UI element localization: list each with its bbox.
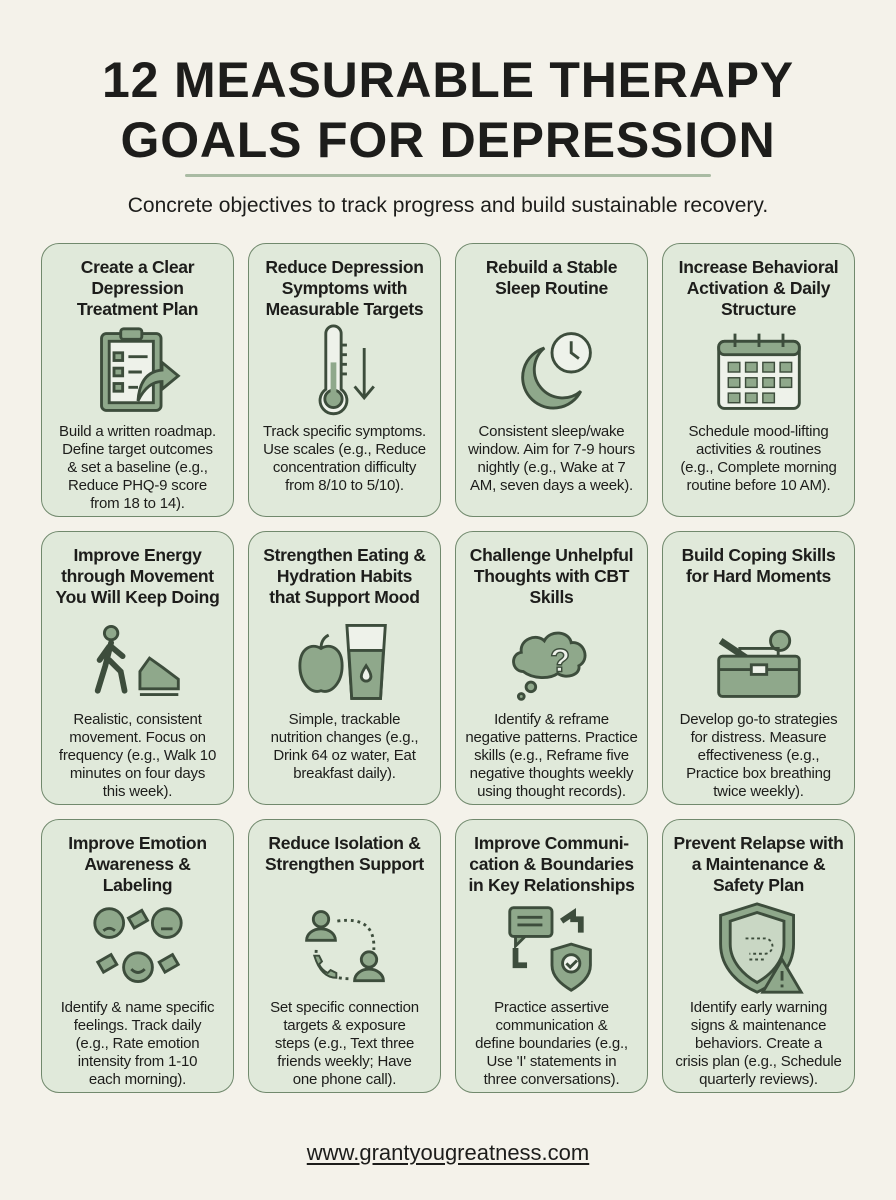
card 8: effectiveness (e.g., [698,747,819,764]
card 6: Hydration Habits [277,566,412,586]
card 2: Use scales (e.g., Reduce [263,441,426,458]
icon: thought cloud: ? [550,642,570,679]
card 4 [662,243,855,517]
card 11: cation & Boundaries [469,854,634,874]
card 4: (e.g., Complete morning [680,459,837,476]
card 9 [41,819,234,1093]
card 11: define boundaries (e.g., [475,1035,628,1052]
card 10: steps (e.g., Text three [275,1035,414,1052]
card 12: quarterly reviews). [699,1071,818,1088]
card 10 [248,819,441,1093]
card 5: movement. Focus on [69,729,206,746]
card 1: Treatment Plan [77,299,198,319]
card 11: Practice assertive [494,999,609,1016]
card 7: Challenge Unhelpful [470,545,633,565]
card 8: for Hard Moments [686,566,831,586]
card 8: for distress. Measure [691,729,826,746]
card 9: each morning). [89,1071,186,1088]
card 7: negative patterns. Practice [465,729,638,746]
card 5: this week). [103,783,172,800]
card 8: Practice box breathing [686,765,831,782]
card 3: AM, seven days a week). [470,477,633,494]
card 3: Rebuild a Stable [486,257,617,277]
card 3: window. Aim for 7-9 hours [468,441,635,458]
card 5 [41,531,234,805]
card 4: Activation & Daily [687,278,830,298]
card 7: negative thoughts weekly [470,765,633,782]
card 8 [662,531,855,805]
card 1: from 18 to 14). [90,495,185,512]
card 10: friends weekly; Have [277,1053,412,1070]
icon: thermometer [318,324,375,416]
card 2: Track specific symptoms. [263,423,426,440]
icon: calendar [717,334,801,410]
card 9: intensity from 1-10 [78,1053,197,1070]
card 5: frequency (e.g., Walk 10 [59,747,216,764]
card 5: through Movement [61,566,214,586]
card 6: that Support Mood [269,587,420,607]
card 5: Realistic, consistent [73,711,202,728]
card 3 [455,243,648,517]
card 7: skills (e.g., Reframe five [474,747,629,764]
card 2: Symptoms with [282,278,407,298]
card 8: twice weekly). [713,783,804,800]
card 10: one phone call). [293,1071,396,1088]
card 1: Define target outcomes [62,441,213,458]
card 12: behaviors. Create a [695,1035,822,1052]
card 2: concentration difficulty [273,459,416,476]
card 1: Build a written roadmap. [59,423,216,440]
card 6 [248,531,441,805]
card 9: feelings. Track daily [74,1017,201,1034]
card 4: Increase Behavioral [679,257,838,277]
card 11: in Key Relationships [468,875,635,895]
card 12: Identify early warning [690,999,827,1016]
card 9: Improve Emotion [68,833,207,853]
icon: walker and shoe [94,625,180,696]
icon: shield with warning [719,902,804,994]
card 12: crisis plan (e.g., Schedule [675,1053,842,1070]
card 6: Simple, trackable [289,711,400,728]
card 3: nightly (e.g., Wake at 7 [477,459,626,476]
card 12: Prevent Relapse with [673,833,844,853]
title [102,52,794,168]
card 4: Schedule mood-lifting [688,423,829,440]
card 12: a Maintenance & [692,854,825,874]
card 4: activities & routines [696,441,821,458]
icon: clipboard [100,327,180,412]
card 12 [662,819,855,1093]
card 2: Measurable Targets [266,299,423,319]
card 4: Structure [721,299,796,319]
title: 12 MEASURABLE THERAPY [102,52,794,108]
card 9: Awareness & [84,854,191,874]
card 1: Create a Clear [81,257,194,277]
card 11: Use 'I' statements in [487,1053,616,1070]
card 5: You Will Keep Doing [56,587,219,607]
card 8: Build Coping Skills [682,545,835,565]
card 10: Set specific connection [270,999,419,1016]
card 7: Thoughts with CBT [474,566,629,586]
card 6: breakfast daily). [293,765,396,782]
card 12: signs & maintenance [691,1017,826,1034]
card 1: Depression [91,278,184,298]
card 11: Improve Communi- [474,833,629,853]
card 5: Improve Energy [73,545,202,565]
card 4: routine before 10 AM). [686,477,831,494]
card 9: (e.g., Rate emotion [76,1035,199,1052]
card 7 [455,531,648,805]
card 1: Reduce PHQ-9 score [68,477,207,494]
card 2: from 8/10 to 5/10). [285,477,404,494]
icon: toolbox [717,630,801,698]
card 6: nutrition changes (e.g., [271,729,418,746]
icon: chat and shield [508,906,592,992]
card 6: Drink 64 oz water, Eat [273,747,416,764]
card 9: Labeling [103,875,172,895]
card 9: Identify & name specific [61,999,214,1016]
card 1: & set a baseline (e.g., [67,459,208,476]
card 10: targets & exposure [283,1017,406,1034]
card 10: Reduce Isolation & [268,833,421,853]
card 11: three conversations). [484,1071,619,1088]
card 7: using thought records). [477,783,626,800]
card 6: Strengthen Eating & [263,545,426,565]
card 5: minutes on four days [70,765,205,782]
title: GOALS FOR DEPRESSION [121,112,775,168]
card 7: Identify & reframe [494,711,609,728]
card 3: Sleep Routine [495,278,608,298]
footer url: www.grantyougreatness.com [307,1140,589,1165]
icon: apple and glass [298,624,387,700]
card 8: Develop go-to strategies [680,711,837,728]
card 2 [248,243,441,517]
subtitle: Concrete objectives to track progress and build sustainable recovery. [128,194,768,217]
card 3: Consistent sleep/wake [479,423,624,440]
card 2: Reduce Depression [265,257,424,277]
card 11: communication & [495,1017,608,1034]
icon: thought cloud [512,632,586,701]
icon: moon and clock [521,332,592,410]
card 7: Skills [530,587,573,607]
card 12: Safety Plan [713,875,804,895]
card 10: Strengthen Support [265,854,424,874]
card 1 [41,243,234,517]
card 11 [455,819,648,1093]
icon: emotion faces [93,907,183,983]
icon: people connected [305,910,385,982]
